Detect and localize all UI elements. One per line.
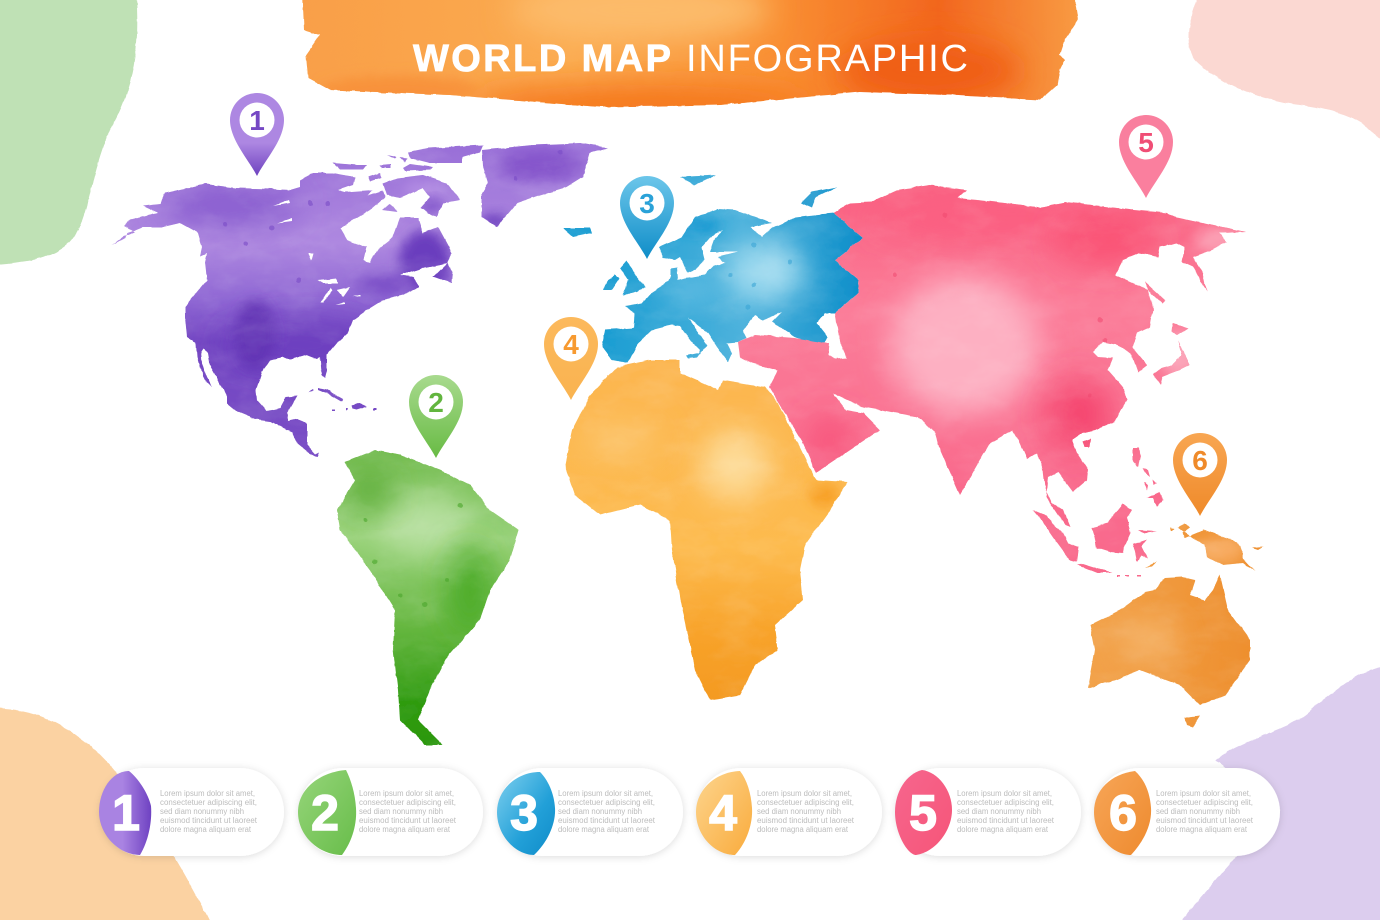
map pin 6 [1173,433,1227,516]
title text [413,38,968,80]
card 2 text: Lorem ipsum dolor sit amet, [359,789,454,798]
legend card 3 [497,768,683,856]
watercolor wash: pink top right [1188,0,1380,150]
card 4 text: consectetuer adipiscing elit, [757,798,854,807]
map pin 2: 2 [428,387,444,418]
map pin 6: 6 [1192,445,1208,476]
map pin 4: 4 [563,329,579,360]
legend card 4 [696,768,882,856]
card 2 text [359,789,457,834]
watercolor wash: green top left [0,0,137,266]
card 2 text: sed diam nonummy nibh [359,807,443,816]
colour badge 4 [696,771,752,855]
card 5 text: consectetuer adipiscing elit, [957,798,1054,807]
card 5 text: dolore magna aliquam erat [957,825,1049,834]
card 5 text: Lorem ipsum dolor sit amet, [957,789,1052,798]
colour badge 2 [298,770,356,855]
card 1 text: dolore magna aliquam erat [160,825,252,834]
card 5 text [957,789,1055,834]
colour badge 3 [497,772,555,855]
map pin 4 [544,317,598,400]
card 1 text: euismod tincidunt ut laoreet [160,816,258,825]
card 6 text: sed diam nonummy nibh [1156,807,1240,816]
title banner [302,0,1078,108]
card 4 text: sed diam nonummy nibh [757,807,841,816]
card 5 text: sed diam nonummy nibh [957,807,1041,816]
card 6 text [1156,789,1254,834]
card 4 text: Lorem ipsum dolor sit amet, [757,789,852,798]
card 2 text: dolore magna aliquam erat [359,825,451,834]
card 1 text: sed diam nonummy nibh [160,807,244,816]
continent: Asia [735,180,1250,580]
card 6 text: dolore magna aliquam erat [1156,825,1248,834]
map pin 3 [620,176,674,259]
colour badge 2: 2 [311,785,339,841]
card 1 text [160,789,258,834]
card 4 text: euismod tincidunt ut laoreet [757,816,855,825]
colour badge 4: 4 [709,785,737,841]
card 3 text: dolore magna aliquam erat [558,825,650,834]
map pin 2 [409,375,463,458]
colour badge 3: 3 [510,785,538,841]
map pin 3: 3 [639,188,655,219]
card 5 text: euismod tincidunt ut laoreet [957,816,1055,825]
map pin 5: 5 [1138,127,1154,158]
card 1 text: consectetuer adipiscing elit, [160,798,257,807]
card 4 text: dolore magna aliquam erat [757,825,849,834]
watercolor wash: purple bottom right [1172,665,1380,920]
colour badge 5 [895,770,952,855]
colour badge 1 [99,771,151,855]
card 3 text [558,789,656,834]
card 4 text [757,789,855,834]
continent: Australia and New Guinea [1088,524,1264,728]
continent: South America [330,445,525,750]
title text: INFOGRAPHIC [686,38,968,80]
card 3 text: euismod tincidunt ut laoreet [558,816,656,825]
colour badge 6: 6 [1109,785,1137,841]
colour badge 6 [1094,771,1151,855]
map pin 1 [230,93,284,176]
continent: Africa [560,355,855,705]
title text: WORLD MAP [413,38,671,80]
card 6 text: consectetuer adipiscing elit, [1156,798,1253,807]
map pin 1: 1 [249,105,265,136]
colour badge 5: 5 [909,785,937,841]
legend card 5 [895,768,1081,856]
legend card 2 [298,768,483,856]
continent: North America and Greenland [100,135,620,465]
continent: Europe [555,170,870,365]
legend card 6 [1094,768,1280,856]
world map [100,135,1270,750]
card 2 text: euismod tincidunt ut laoreet [359,816,457,825]
card 3 text: Lorem ipsum dolor sit amet, [558,789,653,798]
brush stroke background [302,0,1078,108]
legend card 1 [99,768,284,856]
card 3 text: sed diam nonummy nibh [558,807,642,816]
card 6 text: euismod tincidunt ut laoreet [1156,816,1254,825]
watercolor wash: orange bottom left [0,708,214,920]
card 1 text: Lorem ipsum dolor sit amet, [160,789,255,798]
card 3 text: consectetuer adipiscing elit, [558,798,655,807]
lakes [273,200,360,305]
colour badge 1: 1 [112,785,140,841]
card 2 text: consectetuer adipiscing elit, [359,798,456,807]
card 6 text: Lorem ipsum dolor sit amet, [1156,789,1251,798]
map pin 5 [1119,115,1173,198]
